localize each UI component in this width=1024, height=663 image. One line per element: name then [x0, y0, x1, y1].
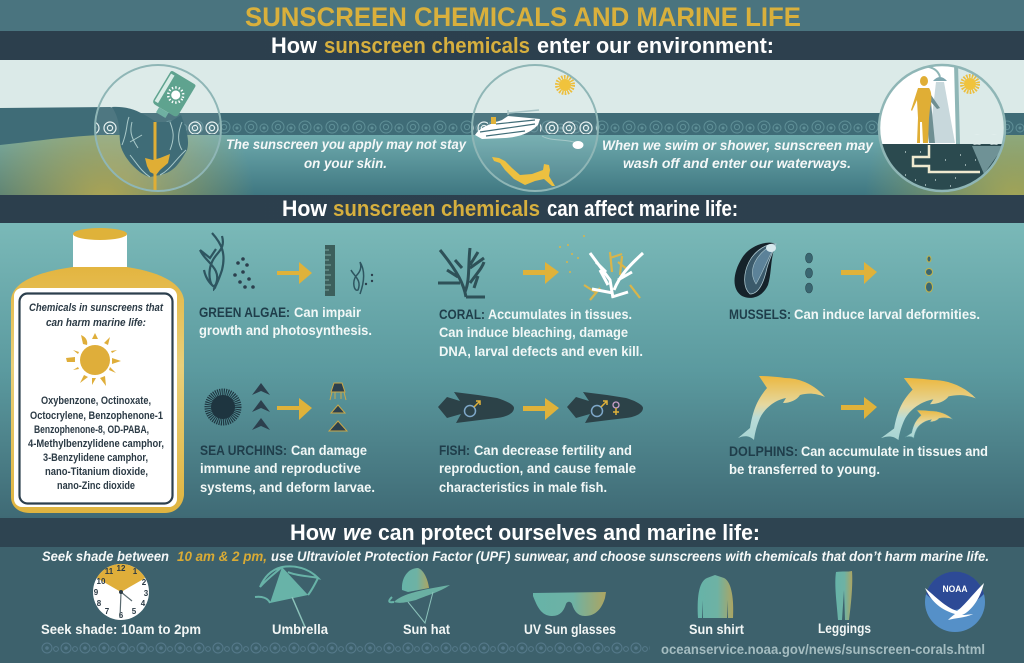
- icon: clock: 8: [97, 599, 102, 608]
- icon: mussels before and after: [734, 243, 932, 298]
- icon: sea urchins before and after: [209, 383, 347, 431]
- heading band: how chemicals affect marine life: can affect marine life:: [547, 196, 738, 221]
- icon: NOAA logo: [925, 572, 985, 632]
- text: swim or shower: wash off and enter our waterways.: [623, 156, 851, 171]
- text: coral: DNA, larval defects and even kill.: [439, 344, 643, 359]
- panel: marine life effects background: [0, 223, 1024, 518]
- icon: green algae before and after: [200, 233, 373, 296]
- sunscreen bottle: [149, 70, 196, 123]
- arrow: [523, 262, 559, 284]
- panel: protection background: [0, 518, 1024, 663]
- icon: clock: 3: [144, 589, 149, 598]
- icon: sun: [66, 333, 121, 386]
- decorative wave row: [40, 641, 650, 655]
- ruler: [325, 245, 335, 296]
- sunscreen bottle with chemical list: 4-Methylbenzylidene camphor,: [28, 438, 164, 450]
- text: dolphins: [729, 444, 988, 477]
- text: sunscreen may not stay on skin: [226, 137, 467, 171]
- small waves: [972, 134, 998, 145]
- heading band: how we can protect: [0, 518, 1024, 547]
- heading band: how chemicals affect marine life: How: [282, 196, 328, 221]
- pipe: [928, 67, 941, 78]
- pouring sunscreen: [154, 122, 156, 190]
- heading band: how chemicals affect marine life: sunscreen chemicals: [333, 196, 540, 221]
- text: sea urchins: immune and reproductive: [200, 461, 361, 476]
- text: sunscreen may not stay on skin: The sunscreen you apply may not stay: [226, 137, 467, 152]
- arrow: [841, 262, 877, 284]
- arrow: [277, 262, 312, 284]
- text: protection advice: 10 am & 2 pm,: [177, 549, 267, 564]
- sun: [964, 78, 976, 90]
- text: sunscreen may not stay on skin: on your skin.: [304, 156, 387, 171]
- icon: clock: 1: [133, 567, 138, 576]
- heading band: how chemicals enter the environment: sunscreen chemicals: [324, 33, 530, 58]
- arrow: [277, 398, 312, 420]
- drain pipes: [913, 145, 980, 172]
- boat: [475, 116, 540, 139]
- text: dolphins: DOLPHINS:: [729, 444, 798, 459]
- text: swim or shower: [602, 138, 874, 171]
- sunscreen bottle with chemical list: [11, 228, 184, 513]
- text: protection advice: use Ultraviolet Protection Factor (UPF) sunwear, and choose sunscreens with chemicals that don’t harm marine life.: [271, 549, 989, 564]
- sunscreen bottle with chemical list: can harm marine life:: [46, 317, 146, 329]
- text: green algae: GREEN ALGAE:: [199, 305, 290, 320]
- text: coral: Can induce bleaching, damage: [439, 325, 628, 340]
- text: coral: CORAL:: [439, 307, 485, 322]
- icon: clock: 12: [117, 564, 126, 573]
- heading band: how chemicals affect marine life: [0, 195, 1024, 223]
- sunscreen bottle with chemical list: Octocrylene, Benzophenone-1: [30, 410, 163, 422]
- text: protection advice: Seek shade between: [42, 549, 169, 564]
- icon: clock: 2: [142, 578, 147, 587]
- arrow: [841, 397, 877, 419]
- sunscreen bottle with chemical list: nano-Zinc dioxide: [57, 480, 135, 492]
- icon: dolphins before and after: [738, 376, 976, 440]
- heading band: how we can protect: can protect ourselves and marine life:: [378, 520, 760, 545]
- heading band: how we can protect: we: [343, 520, 372, 545]
- icon: coral before and after bleaching: [438, 235, 643, 300]
- icon: clock: 6: [119, 611, 124, 620]
- text: green algae: [199, 305, 372, 338]
- illustration: shower and drain: [878, 64, 1006, 192]
- text: fish: [439, 443, 636, 495]
- heading band: how chemicals enter the environment: How: [271, 33, 318, 58]
- swimmer: [492, 157, 555, 186]
- text: sea urchins: systems, and deform larvae.: [200, 480, 375, 495]
- illustration: hand applying sunscreen: [94, 65, 226, 191]
- wall: [954, 63, 960, 144]
- icon: clock: 5: [132, 607, 137, 616]
- text: coral: [439, 307, 643, 359]
- panel: environment scene: [0, 60, 1024, 195]
- label: UV sun glasses: UV Sun glasses: [524, 621, 616, 637]
- text: sea urchins: [200, 443, 375, 495]
- sun: [559, 79, 571, 91]
- icon: clock: 9: [94, 588, 99, 597]
- buoy: [542, 136, 577, 143]
- text: mussels: MUSSELS:: [729, 307, 791, 322]
- icon: clock: [93, 564, 149, 620]
- heading band: how chemicals enter the environment: [0, 31, 1024, 60]
- text: dolphins: Can accumulate in tissues and: [801, 444, 988, 459]
- icon: sun hat: [389, 568, 450, 623]
- ground specks: [905, 152, 976, 186]
- source url: oceanservice.noaa.gov/news/sunscreen-corals.html: [661, 641, 985, 657]
- icon: clock: 7: [105, 607, 110, 616]
- text: sea urchins: SEA URCHINS:: [200, 443, 287, 458]
- label: sun hat: Sun hat: [403, 621, 450, 637]
- text: swim or shower: When we swim or shower, sunscreen may: [602, 138, 874, 153]
- icon: umbrella: [255, 566, 318, 627]
- icon: clock: 11: [105, 567, 114, 576]
- person: [928, 95, 940, 143]
- sunscreen bottle with chemical list: nano-Titanium dioxide,: [45, 466, 148, 478]
- sunscreen bottle with chemical list: Oxybenzone, Octinoxate,: [41, 395, 151, 407]
- label: sun shirt: Sun shirt: [689, 621, 744, 637]
- hands: [112, 107, 188, 177]
- text: fish: FISH:: [439, 443, 470, 458]
- icon: fish before and after: [438, 392, 643, 423]
- sunscreen bottle with chemical list: 3-Benzylidene camphor,: [43, 452, 148, 464]
- text: fish: Can decrease fertility and: [474, 443, 632, 458]
- label: leggings: Leggings: [818, 620, 871, 636]
- arrow: [523, 398, 559, 420]
- label: umbrella: Umbrella: [272, 621, 328, 637]
- title band background: [0, 0, 1024, 32]
- text: green algae: Can impair: [294, 305, 362, 320]
- text: coral: Accumulates in tissues.: [488, 307, 632, 322]
- text: fish: characteristics in male fish.: [439, 480, 607, 495]
- text: dolphins: be transferred to young.: [729, 462, 880, 477]
- title: SUNSCREEN CHEMICALS AND MARINE LIFE: [245, 2, 801, 32]
- text: mussels: Can induce larval deformities.: [794, 307, 980, 322]
- label: seek shade: Seek shade: 10am to 2pm: [41, 621, 201, 637]
- icon: sunglasses: [533, 592, 606, 616]
- text: sea urchins: Can damage: [291, 443, 367, 458]
- illustration: boat and swimmer: [472, 65, 600, 191]
- sunscreen bottle with chemical list: Benzophenone-8, OD-PABA,: [34, 424, 149, 436]
- heading band: how we can protect: How: [290, 520, 337, 545]
- sunscreen bottle with chemical list: Chemicals in sunscreens that: [29, 302, 164, 314]
- heading band: how chemicals enter the environment: enter our environment:: [537, 33, 774, 58]
- icon: clock: 10: [97, 577, 106, 586]
- text: green algae: growth and photosynthesis.: [199, 323, 372, 338]
- icon: leggings: [835, 571, 852, 620]
- text: fish: reproduction, and cause female: [439, 461, 636, 476]
- icon: sun shirt: [698, 575, 733, 618]
- shower light cone: [932, 82, 955, 143]
- icon: clock: 4: [141, 599, 146, 608]
- icon: NOAA logo: NOAA: [942, 584, 968, 594]
